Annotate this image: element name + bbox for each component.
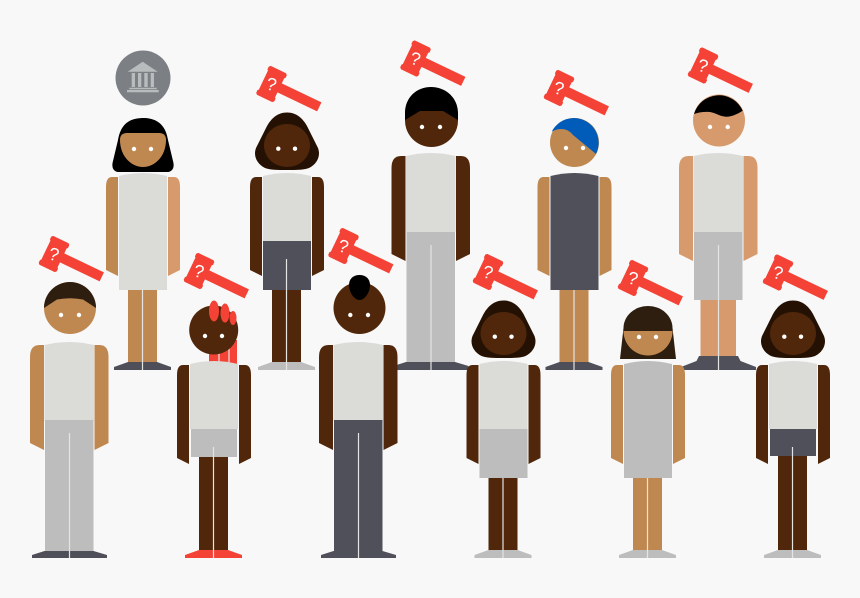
icon: gavel 9 <box>617 259 688 315</box>
icon: gavel 3: ? <box>264 74 279 95</box>
icon: courthouse badge <box>116 50 170 106</box>
icon: gavel 10: ? <box>771 262 785 284</box>
head <box>550 118 599 167</box>
icon: gavel 3 <box>256 65 326 121</box>
icon: gavel 4 <box>328 227 398 283</box>
icon: gavel 10 <box>762 254 833 310</box>
head <box>620 306 676 359</box>
figure: person top row, blue head covering <box>538 118 612 370</box>
body <box>392 153 470 370</box>
head <box>112 118 174 172</box>
body <box>177 361 251 558</box>
icon: gavel 6 <box>543 69 614 125</box>
figure: person bottom row, far right <box>756 300 830 558</box>
icon: gavel 6: ? <box>552 78 566 99</box>
body <box>538 173 612 370</box>
icon: gavel 8: ? <box>481 262 495 283</box>
figure: person top row, far right <box>679 94 758 370</box>
head <box>761 300 825 358</box>
body <box>250 173 324 370</box>
head <box>255 112 319 170</box>
body <box>679 153 758 370</box>
figure: person bottom row, straight fringe <box>611 306 685 558</box>
fingers <box>209 300 236 325</box>
icon: gavel 5 <box>400 40 470 96</box>
icon: gavel 7 <box>687 47 758 103</box>
figure: person with raised red hand <box>177 300 251 558</box>
figure: person bottom row, centre tall <box>319 275 398 558</box>
head <box>334 275 386 334</box>
icon: gavel 8 <box>472 253 543 309</box>
head <box>405 87 458 147</box>
body <box>756 361 830 558</box>
body <box>611 361 685 558</box>
figure: person top row, second <box>250 112 324 370</box>
figure: person bottom row, long hair <box>466 300 540 558</box>
head <box>472 300 535 358</box>
icon: gavel 4: ? <box>336 236 351 257</box>
figure: person bottom row, far left <box>30 282 108 558</box>
body <box>30 342 108 558</box>
icon: gavel 2: ? <box>192 261 206 282</box>
figure: judge with courthouse badge <box>106 118 180 370</box>
icon: gavel 7: ? <box>696 55 710 77</box>
icon: gavel 1 <box>38 235 109 291</box>
body <box>466 361 540 558</box>
body <box>319 342 398 558</box>
body <box>106 173 180 370</box>
head <box>189 306 238 354</box>
icon: gavel 9: ? <box>626 268 640 289</box>
figure: person top row, tall centre <box>392 87 470 370</box>
icon: gavel 2 <box>183 252 254 308</box>
head <box>44 282 96 334</box>
head <box>693 94 745 146</box>
icon: gavel 5: ? <box>408 48 423 70</box>
icon: gavel 1: ? <box>47 244 61 265</box>
raised hand <box>209 340 237 366</box>
